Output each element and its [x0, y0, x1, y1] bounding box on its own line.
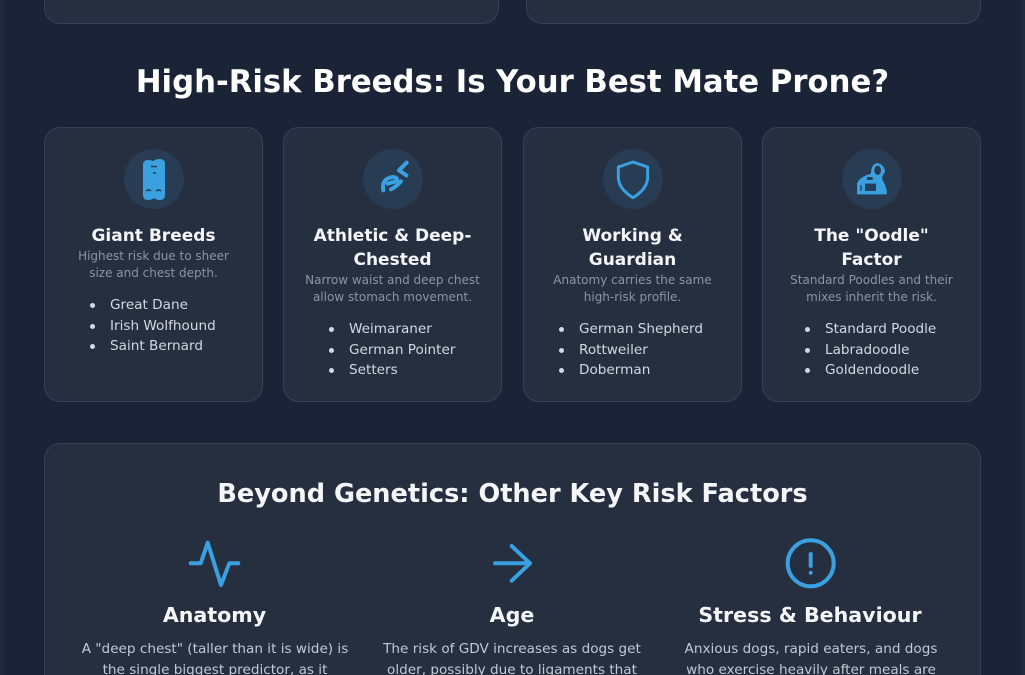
icon: poodle [842, 149, 902, 209]
card title: Giant Breeds [91, 226, 216, 246]
panel: oodle factor [762, 127, 981, 402]
panel: top right card (cropped) [526, 0, 981, 24]
factor: age [383, 544, 641, 675]
card description: high-risk profile. [584, 290, 681, 304]
breed list: Labradoodle [825, 342, 909, 358]
factor text [383, 641, 641, 675]
breed list: Doberman [579, 362, 650, 378]
breed list: Irish Wolfhound [110, 318, 216, 334]
factor title: Stress & Behaviour [698, 603, 922, 627]
factor text: Anxious dogs, rapid eaters, and dogs [685, 641, 937, 657]
icon: pulse [188, 540, 240, 587]
icon: giant breeds [124, 149, 184, 209]
card title: Chested [353, 250, 432, 270]
breed list [90, 297, 216, 354]
card title: Athletic & Deep- [314, 226, 471, 246]
card title [814, 226, 929, 270]
breed list: Saint Bernard [110, 338, 203, 354]
card title: The "Oodle" [814, 226, 929, 246]
panel: working and guardian [523, 127, 742, 402]
panel: athletic and deep-chested [283, 127, 502, 402]
card description: Standard Poodles and their [790, 273, 953, 287]
card description [78, 249, 229, 280]
breed list: Standard Poodle [825, 321, 936, 337]
card description: Anatomy carries the same [553, 273, 712, 287]
factor title: Anatomy [163, 603, 266, 627]
card description [790, 273, 953, 304]
card description: Narrow waist and deep chest [305, 273, 480, 287]
breed list [559, 321, 703, 378]
card title: Working & [582, 226, 683, 246]
factor title: Age [490, 603, 534, 627]
heading: high-risk breeds: High-Risk Breeds: Is Your Best Mate Prone? [136, 64, 889, 100]
breed list: Setters [349, 362, 398, 378]
icon: alert circle [786, 538, 836, 588]
breed list [329, 321, 456, 378]
panel: giant breeds [44, 127, 263, 402]
factor text: The risk of GDV increases as dogs get [383, 641, 641, 657]
heading: other key risk factors: Beyond Genetics: Other Key Risk Factors [217, 479, 808, 509]
breed list: Great Dane [110, 297, 188, 313]
factor: stress and behaviour [684, 538, 937, 675]
breed list: German Pointer [349, 342, 455, 358]
factor text [684, 641, 937, 675]
card title: Guardian [589, 250, 676, 270]
card title [314, 226, 471, 270]
breed list: Goldendoodle [825, 362, 919, 378]
breed list [805, 321, 936, 378]
breed list: German Shepherd [579, 321, 703, 337]
icon: athletic [362, 149, 422, 209]
breed list: Rottweiler [579, 342, 648, 358]
card title [582, 226, 683, 270]
card description: mixes inherit the risk. [806, 290, 937, 304]
factor: anatomy [82, 540, 348, 675]
panel: top left card (cropped) [44, 0, 499, 24]
factor text [82, 641, 348, 675]
breed list: Weimaraner [349, 321, 432, 337]
panel: other risk factors [44, 443, 981, 675]
card description [305, 273, 480, 304]
icon: shield [602, 149, 662, 209]
card description [553, 273, 712, 304]
card description: Highest risk due to sheer [78, 249, 229, 263]
icon: arrow [493, 544, 532, 583]
card title: Factor [841, 250, 902, 270]
factor text: A "deep chest" (taller than it is wide) is [82, 641, 348, 657]
card description: size and chest depth. [89, 266, 218, 280]
card description: allow stomach movement. [313, 290, 472, 304]
